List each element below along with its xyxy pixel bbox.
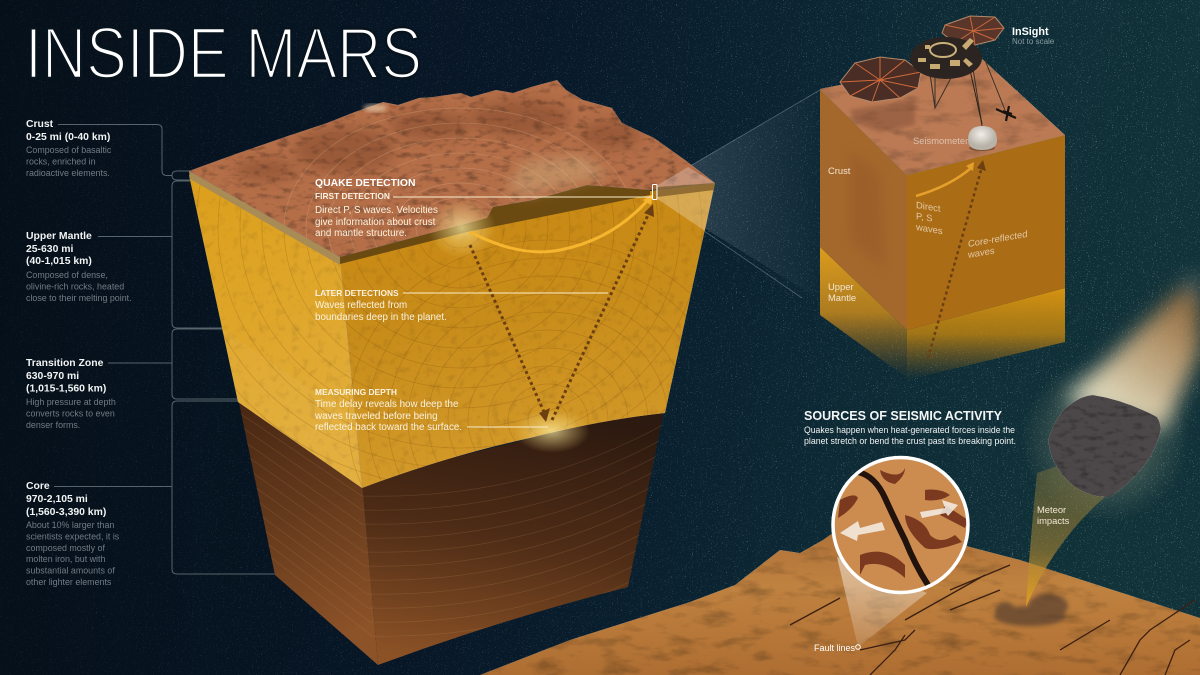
body text — [804, 425, 1016, 446]
zoom wedge: over block — [656, 167, 715, 231]
seismic wave rings — [196, 185, 702, 488]
core left face — [238, 398, 378, 665]
label: transition zone: Transition Zone — [26, 358, 104, 369]
text: later detections: boundaries deep in the planet. — [315, 312, 447, 323]
impact dust — [994, 594, 1068, 626]
text: measuring depth — [314, 387, 548, 433]
panel: layer labels — [26, 119, 275, 587]
text: first detection: and mantle structure. — [315, 228, 407, 239]
label: upper mantle: Upper Mantle — [26, 231, 92, 242]
insight labels: Upper — [828, 281, 854, 292]
label: meteor impacts: Meteor — [1037, 504, 1066, 515]
label: core: Core — [26, 481, 50, 492]
label: crust: 0-25 mi (0-40 km) — [26, 132, 110, 143]
terrain fault cracks — [790, 565, 1195, 675]
panel shadow — [850, 100, 915, 132]
label: core: substantial amounts of — [26, 566, 115, 576]
seismometer dome — [968, 126, 997, 151]
block: mantle right — [907, 288, 1065, 380]
direct wave arrow — [470, 194, 653, 252]
quake glow — [428, 198, 496, 258]
seismometer tether — [970, 70, 982, 124]
mountain shading — [235, 100, 640, 180]
label: transition zone: High pressure at depth — [26, 397, 116, 407]
text: first detection: Direct P, S waves. Velocities — [315, 205, 438, 216]
text: later detections: Waves reflected from — [315, 300, 407, 311]
label: core — [26, 401, 275, 587]
crack — [858, 472, 928, 585]
label: core: (1,560-3,390 km) — [26, 507, 106, 518]
insight labels: Direct — [916, 200, 941, 215]
transition zone shading — [222, 328, 362, 488]
label: core: composed mostly of — [26, 543, 105, 553]
surface bright peak — [363, 104, 387, 112]
label: core: About 10% larger than — [26, 520, 114, 530]
icon: meteor — [1049, 395, 1161, 497]
text: later detections: LATER DETECTIONS — [315, 288, 399, 298]
surface wave rings — [284, 108, 626, 254]
magnifier beam — [837, 557, 927, 647]
insight labels: Seismometer — [913, 135, 968, 146]
rock blotches — [838, 468, 968, 578]
label: upper mantle: close to their melting point. — [26, 293, 132, 303]
label: meteor impacts — [1037, 504, 1070, 526]
label: upper mantle — [26, 181, 222, 328]
text: measuring depth: reflected back toward the surface. — [315, 422, 462, 433]
surface pale patch — [505, 155, 610, 196]
heading: quake detection: QUAKE DETECTION — [315, 178, 415, 189]
insight labels — [828, 26, 1055, 303]
label: transition zone: denser forms. — [26, 420, 80, 430]
insight labels: Crust — [828, 165, 851, 176]
label: crust: Composed of basaltic — [26, 145, 112, 155]
label: upper mantle: (40-1,015 km) — [26, 256, 92, 267]
block: mantle left — [820, 247, 907, 378]
text: first detection: give information about crust — [315, 217, 436, 228]
panel: sources of seismic activity text — [804, 409, 1016, 446]
text: measuring depth: waves traveled before being — [314, 411, 438, 422]
meteor halo — [1021, 358, 1189, 522]
label: crust: Crust — [26, 119, 54, 130]
body text: Quakes happen when heat-generated forces inside the — [804, 425, 1015, 435]
insight labels: waves — [915, 222, 943, 237]
crust band — [340, 185, 650, 264]
insight labels: Mantle — [828, 292, 856, 303]
arrow: right — [920, 500, 958, 518]
text: first detection — [315, 191, 652, 239]
insight labels: Core-reflected — [968, 229, 1027, 250]
zoom wedge: outer — [656, 90, 820, 300]
core-reflected wave — [928, 160, 986, 358]
label: core: molten iron, but with — [26, 554, 105, 564]
panel: mars cutaway block — [174, 0, 748, 665]
seismometer marker — [652, 184, 657, 200]
right solar panel — [942, 16, 1004, 45]
label: crust: radioactive elements. — [26, 168, 110, 178]
label: core: 970-2,105 mi — [26, 494, 88, 505]
icon: fault magnifier — [832, 457, 968, 593]
mantle left face — [189, 175, 362, 488]
icon: insight lander — [840, 16, 1016, 151]
dotted wave: up — [552, 204, 654, 420]
body text: planet stretch or bend the crust past its breaking point. — [804, 436, 1016, 446]
label: core: scientists expected, it is — [26, 532, 120, 542]
label: transition zone: converts rocks to even — [26, 408, 115, 418]
label: crust — [26, 119, 190, 180]
text: measuring depth: MEASURING DEPTH — [315, 387, 397, 397]
text: measuring depth: Time delay reveals how deep the — [315, 399, 459, 410]
label: upper mantle: olivine-rich rocks, heated — [26, 282, 124, 292]
label: crust: rocks, enriched in — [26, 156, 96, 166]
block: crust right — [907, 135, 1065, 330]
panel: quake detection text — [314, 178, 652, 433]
insight labels: Not to scale — [1012, 37, 1055, 46]
wind shield instrument — [996, 106, 1016, 121]
direct wave — [916, 162, 974, 196]
label: transition zone — [26, 329, 238, 430]
core wave lines — [238, 412, 668, 636]
title: INSIDE MARS — [25, 14, 422, 94]
text: first detection: FIRST DETECTION — [315, 191, 390, 201]
label: transition zone: 630-970 mi — [26, 371, 79, 382]
lander legs — [930, 60, 1005, 126]
heading: sources: SOURCES OF SEISMIC ACTIVITY — [804, 409, 1003, 423]
label: meteor impacts: impacts — [1037, 515, 1070, 526]
core right face — [362, 405, 665, 665]
meteor trail — [1065, 268, 1200, 430]
crust strip on left face — [189, 171, 340, 265]
label: core: other lighter elements — [26, 577, 112, 587]
arrow: left — [840, 521, 885, 541]
text: later detections — [315, 288, 608, 323]
label: transition zone: (1,015-1,560 km) — [26, 384, 106, 394]
meteor impact beam — [1026, 465, 1105, 607]
insight labels: P, S — [916, 211, 933, 225]
lander deck — [910, 37, 982, 79]
dotted wave: down — [470, 245, 550, 422]
label: fault lines: Fault lines — [814, 643, 856, 653]
block: crust left — [820, 89, 907, 330]
mantle right face — [340, 183, 715, 488]
label: upper mantle: 25-630 mi — [26, 244, 73, 255]
terrain — [480, 525, 1200, 675]
crust left streak — [850, 150, 885, 270]
surface top with mountains — [189, 80, 715, 257]
reflection glow — [514, 409, 590, 453]
panel: insight block — [820, 16, 1065, 380]
label: upper mantle: Composed of dense, — [26, 270, 108, 280]
insight labels: InSight — [1012, 26, 1049, 38]
insight labels: waves — [967, 245, 995, 261]
block: surface — [820, 57, 1065, 175]
lens ring — [833, 458, 968, 592]
left solar panel — [840, 57, 921, 102]
